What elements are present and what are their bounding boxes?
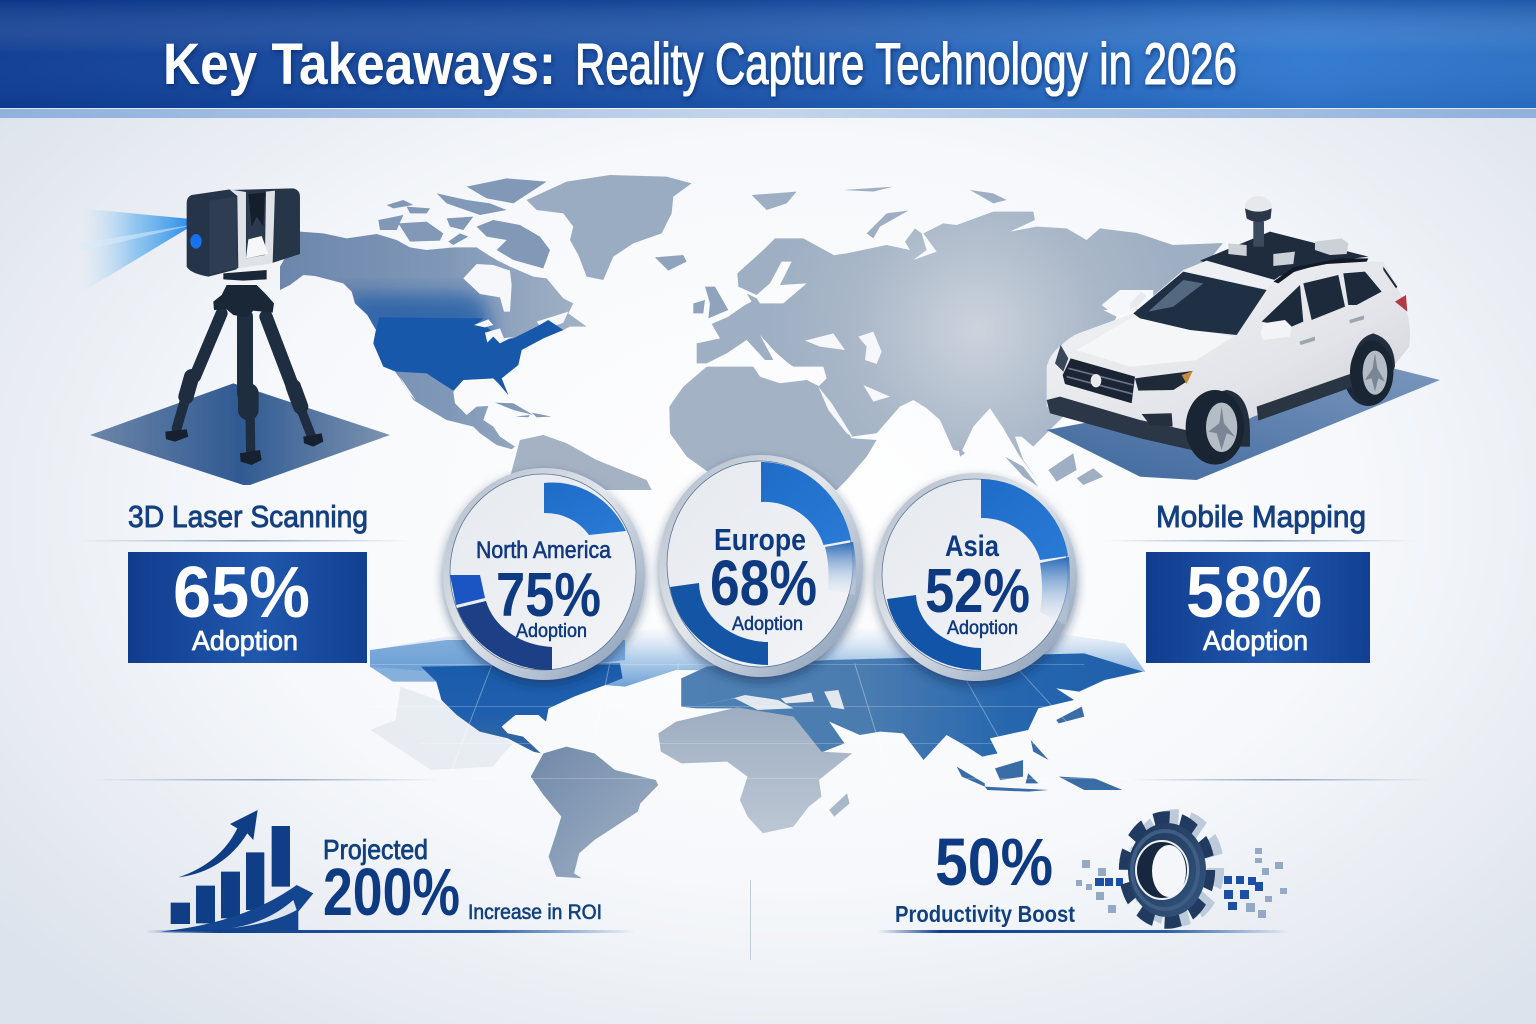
header background	[0, 0, 1536, 108]
map: South America lower	[531, 747, 658, 878]
tripod feet	[165, 429, 323, 465]
text: Increase in ROI: Increase in ROI	[468, 901, 602, 924]
donut: North America	[443, 468, 645, 680]
map: Africa lower	[658, 707, 852, 833]
vehicle body	[1047, 262, 1410, 448]
scanner ground plane	[90, 383, 390, 485]
map: United States	[373, 317, 563, 395]
label: 3D Laser Scanning: 3D Laser Scanning	[128, 499, 368, 534]
world map: Eurasia and Africa upper	[669, 187, 1223, 490]
donut segments	[544, 483, 626, 535]
map: Eurasia	[697, 212, 1223, 482]
icon: data pixels	[1076, 848, 1287, 918]
panel: mobile mapping	[1105, 499, 1415, 663]
donut: Europe: 68%	[710, 547, 817, 619]
header accent stripe	[0, 109, 1536, 118]
stat box	[1146, 552, 1370, 663]
world map: lower reflected continents	[370, 625, 1146, 878]
laser beam	[80, 208, 202, 293]
map: pale grey patch	[370, 687, 513, 770]
scanner lens	[190, 234, 202, 249]
stat box: 65%	[173, 553, 310, 633]
donut: North America: Adoption	[516, 621, 587, 642]
vehicle grille	[1063, 358, 1135, 403]
donut labels: Europe	[714, 522, 806, 557]
tripod legs	[177, 313, 312, 452]
panel: productivity boost	[878, 820, 1290, 933]
vehicle front wheel	[1186, 390, 1244, 465]
icon: growth chart with arrow	[160, 810, 313, 932]
vehicle taillight	[1395, 295, 1407, 312]
map: Southeast Asia islands	[1005, 453, 1103, 487]
map: pale blue North America	[370, 640, 625, 682]
map: Black Sea	[805, 333, 845, 350]
title	[163, 32, 1237, 97]
vehicle shadow	[1047, 367, 1440, 480]
title: Key Takeaways:	[163, 32, 556, 97]
vehicle door handles	[1299, 315, 1364, 345]
map: blue Eurasia	[681, 653, 1143, 760]
map: grid lines	[370, 663, 1135, 797]
panel: 3D laser scanning	[80, 499, 410, 663]
map: Mediterranean lower	[689, 690, 844, 710]
vehicle rear wheel hub	[1350, 341, 1393, 405]
vehicle windshield	[1133, 272, 1267, 335]
map: Arctic islands east	[752, 187, 1007, 238]
tripod head	[213, 285, 274, 317]
vehicle roof sensors	[1228, 238, 1348, 266]
map: Caspian Sea	[858, 332, 882, 364]
stat box: Adoption	[192, 625, 298, 656]
map: pale blue horizon band	[370, 625, 1146, 687]
title: Reality Capture Technology in 2026	[575, 32, 1237, 97]
map: Persian Gulf	[863, 385, 890, 402]
map: Sea of Japan	[1102, 290, 1153, 317]
scanner body	[223, 270, 267, 281]
map: Red Sea	[818, 387, 853, 437]
vehicle antenna	[1245, 196, 1272, 247]
map: Greenland	[527, 175, 692, 280]
label: Mobile Mapping: Mobile Mapping	[1156, 499, 1366, 534]
icon: 3D laser scanner on tripod	[80, 188, 390, 485]
panel: projected ROI	[145, 810, 635, 933]
map: Arctic islands	[378, 178, 550, 268]
map: Hudson Bay	[463, 264, 512, 312]
icon: mobile mapping vehicle	[1047, 196, 1440, 480]
donut: Asia: Adoption	[947, 618, 1018, 639]
vehicle lower bumper	[1047, 397, 1193, 450]
map: Indonesia and Japan	[957, 707, 1123, 792]
text: 50%: 50%	[935, 825, 1053, 900]
map: Madagascar	[829, 793, 850, 817]
text: Productivity Boost: Productivity Boost	[895, 901, 1075, 927]
text: 200%: 200%	[323, 855, 460, 930]
map: Canada blue shading	[343, 293, 493, 343]
donut labels: North America	[476, 537, 612, 564]
header banner	[0, 0, 1536, 118]
map: Great Lakes	[474, 319, 513, 343]
donut: Europe: Adoption	[732, 614, 803, 635]
vehicle side windows	[1262, 285, 1303, 327]
donut labels: Asia	[945, 530, 999, 563]
vehicle roof rack	[1200, 232, 1368, 281]
map: Sri Lanka	[958, 447, 965, 457]
map: South America top	[507, 435, 652, 490]
vehicle wheel arches	[1193, 333, 1395, 447]
vehicle side cladding	[1257, 374, 1353, 421]
donut: Europe	[659, 455, 863, 677]
map: Caribbean islands	[495, 403, 552, 417]
map: Baja	[400, 377, 416, 401]
map: Iceland	[655, 255, 687, 271]
stat box: 58%	[1186, 553, 1322, 633]
donut: North America: 75%	[496, 561, 601, 630]
vehicle side mirror	[1261, 320, 1292, 340]
map: blue North America	[421, 663, 623, 753]
donut segments	[761, 462, 851, 545]
map: North America	[280, 232, 587, 449]
map: Africa	[669, 367, 877, 490]
stat box: Adoption	[1203, 625, 1308, 656]
map: British Isles	[693, 287, 728, 318]
donut segments	[981, 479, 1068, 560]
stat box	[128, 552, 367, 663]
donut: Asia: 52%	[925, 557, 1030, 626]
vehicle headlight	[1135, 371, 1193, 391]
world map: Americas upper	[280, 175, 692, 490]
vehicle rear wheel back	[1343, 339, 1393, 406]
icon: gear	[1127, 820, 1216, 918]
scanner silver frame	[229, 189, 275, 268]
donut: Asia	[875, 473, 1077, 681]
text: Projected: Projected	[323, 834, 428, 865]
